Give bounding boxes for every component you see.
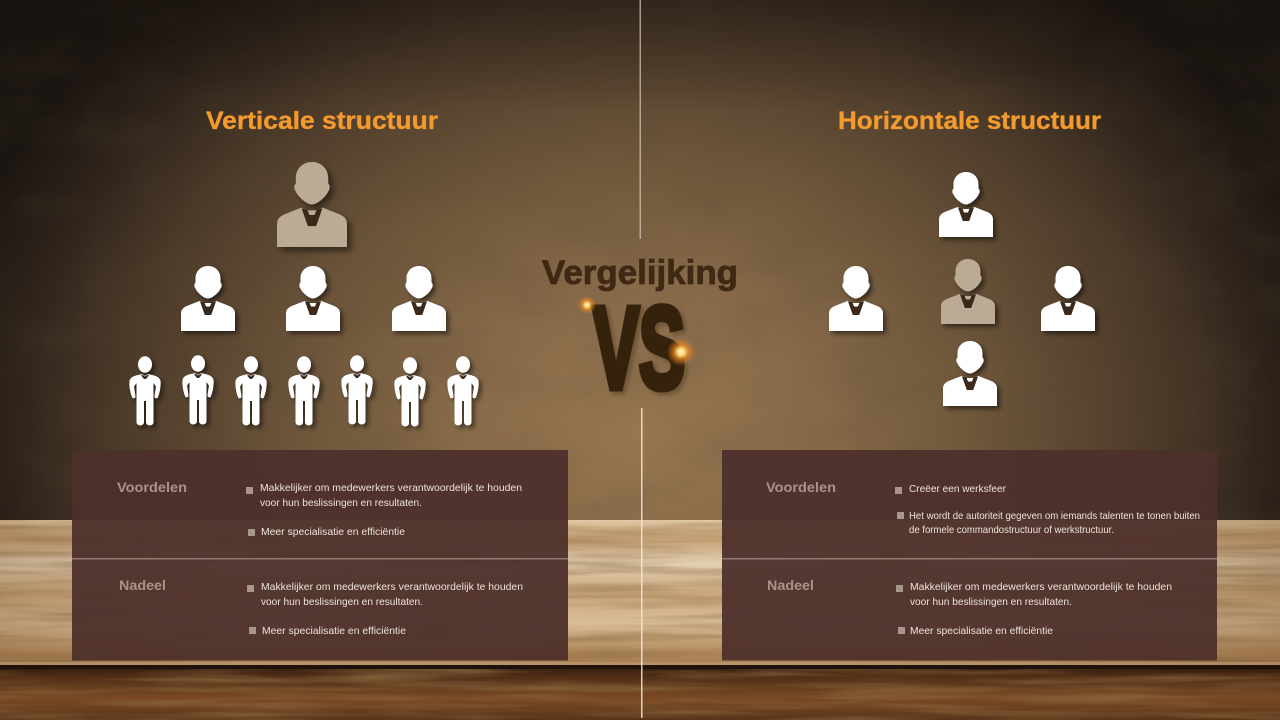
icon: middle manager 1: [181, 266, 235, 331]
icon: large spark: [667, 338, 695, 366]
icon: employee 6: [394, 357, 426, 426]
icon: right person: [1041, 266, 1095, 331]
org chart: vertical hierarchy: [129, 162, 479, 426]
panel: horizontal structure pros and cons: [722, 450, 1217, 660]
icon: top person: [939, 172, 993, 237]
icon: employee 7: [447, 356, 479, 425]
list: pros: [246, 482, 522, 538]
heading: vertical structure: Verticale structuur: [206, 107, 438, 135]
list: pros: Makkelijker om medewerkers verantwoordelijk te houden: [260, 482, 522, 494]
background: wall: [0, 0, 1280, 530]
icon: employee 5: [341, 355, 373, 424]
subheading: pros: Voordelen: [766, 479, 836, 495]
icon: employee 4: [288, 356, 320, 425]
list: cons: [896, 581, 1172, 637]
list: cons: Makkelijker om medewerkers verantwoordelijk te houden: [910, 581, 1172, 593]
divider: top centre line: [640, 0, 641, 239]
icon: small spark: [578, 296, 596, 314]
icon: left person: [829, 266, 883, 331]
list: cons: Makkelijker om medewerkers verantwoordelijk te houden: [261, 581, 523, 593]
background: wooden table top: [0, 520, 1280, 666]
VS emblem: VS: [593, 283, 685, 413]
list: cons: Meer specialisatie en efficiëntie: [262, 625, 406, 637]
icon: employee 2: [182, 355, 214, 424]
list: pros: Creëer een werksfeer: [909, 483, 1006, 495]
icon: top manager: [277, 162, 347, 247]
divider: bottom centre line: [641, 408, 642, 718]
subheading: cons: Nadeel: [119, 577, 166, 593]
list: pros: Meer specialisatie en efficiëntie: [261, 526, 405, 538]
list: cons: voor hun beslissingen en resultaten.: [261, 596, 423, 608]
panel: vertical structure pros and cons: [72, 450, 568, 660]
background: wooden table front edge: [0, 662, 1280, 720]
list: pros: de formele commandostructuur of werkstructuur.: [909, 524, 1114, 536]
list: cons: voor hun beslissingen en resultaten.: [910, 596, 1072, 608]
icon: employee 1: [129, 356, 161, 425]
subheading: cons: Nadeel: [767, 577, 814, 593]
subheading: pros: Voordelen: [117, 479, 187, 495]
list: pros: [895, 483, 1200, 536]
list: cons: Meer specialisatie en efficiëntie: [910, 625, 1053, 637]
icon: middle manager 2: [286, 266, 340, 331]
icon: bottom person: [943, 341, 997, 406]
icon: centre person: [941, 259, 995, 324]
list: pros: Het wordt de autoriteit gegeven om iemands talenten te tonen buiten: [909, 510, 1200, 522]
heading: horizontal structure: Horizontale structuur: [838, 107, 1101, 135]
icon: middle manager 3: [392, 266, 446, 331]
list: cons: [247, 581, 523, 637]
VS emblem: [578, 283, 695, 413]
centre title: comparison: Vergelijking: [542, 254, 738, 292]
icon: employee 3: [235, 356, 267, 425]
org chart: horizontal structure: [829, 172, 1095, 406]
list: pros: voor hun beslissingen en resultaten.: [260, 497, 422, 509]
